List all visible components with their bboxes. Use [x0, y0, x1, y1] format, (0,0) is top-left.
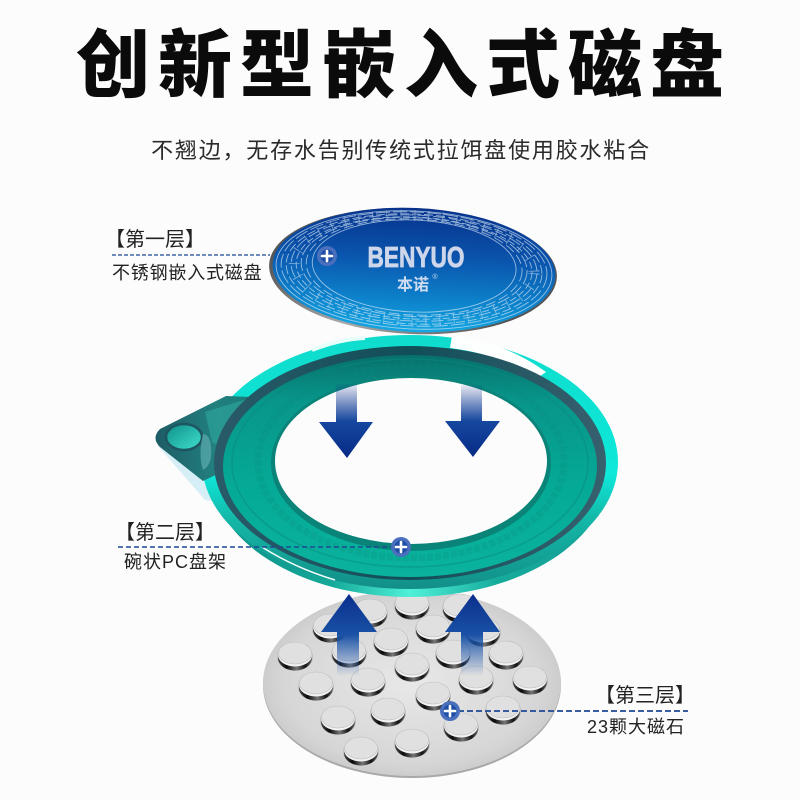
rim highlights — [312, 338, 365, 350]
label: first layer: 不锈钢嵌入式磁盘 — [112, 263, 262, 283]
label: second layer: 碗状PC盘架 — [124, 552, 227, 572]
marker: third layer — [440, 701, 460, 721]
meander border — [274, 205, 554, 335]
label: third layer: 23颗大磁石 — [587, 717, 685, 737]
ring shading — [232, 359, 588, 567]
panel: third layer magnet plate — [263, 590, 561, 778]
title: 创新型嵌入式磁盘 — [76, 24, 732, 107]
bowl tab underside — [157, 445, 240, 505]
hole inner wall — [271, 375, 551, 551]
marker: first layer — [317, 246, 337, 266]
label: third layer: 【第三层】 — [595, 684, 695, 707]
dark band — [214, 346, 606, 580]
logo: BENYUO — [368, 242, 464, 274]
label: third layer — [440, 684, 695, 737]
panel: first layer stainless disc — [266, 202, 560, 340]
bowl lip — [210, 343, 610, 597]
arrow: down left — [319, 384, 373, 458]
panel: second layer bowl — [156, 335, 618, 597]
label: second layer — [115, 521, 411, 572]
tab hole — [166, 424, 202, 450]
label: first layer — [105, 228, 337, 283]
tab — [156, 396, 275, 481]
registered mark: ® — [432, 273, 438, 281]
logo chinese: 本诺 — [397, 276, 429, 294]
meander pattern — [258, 366, 564, 558]
marker: second layer — [391, 537, 411, 557]
label: first layer: 【第一层】 — [105, 228, 205, 251]
bowl rim — [202, 335, 618, 589]
arrow: down right — [445, 385, 500, 457]
magnets — [277, 591, 548, 766]
lower rim streak — [262, 547, 335, 580]
subtitle: 不翘边，无存水告别传统式拉饵盘使用胶水粘合 — [151, 138, 651, 163]
arrow: up right — [445, 594, 500, 675]
arrow: up left — [321, 594, 377, 675]
hook — [200, 434, 211, 470]
teal ring — [223, 355, 597, 577]
bowl hole — [275, 378, 547, 544]
label: second layer: 【第二层】 — [115, 521, 215, 544]
